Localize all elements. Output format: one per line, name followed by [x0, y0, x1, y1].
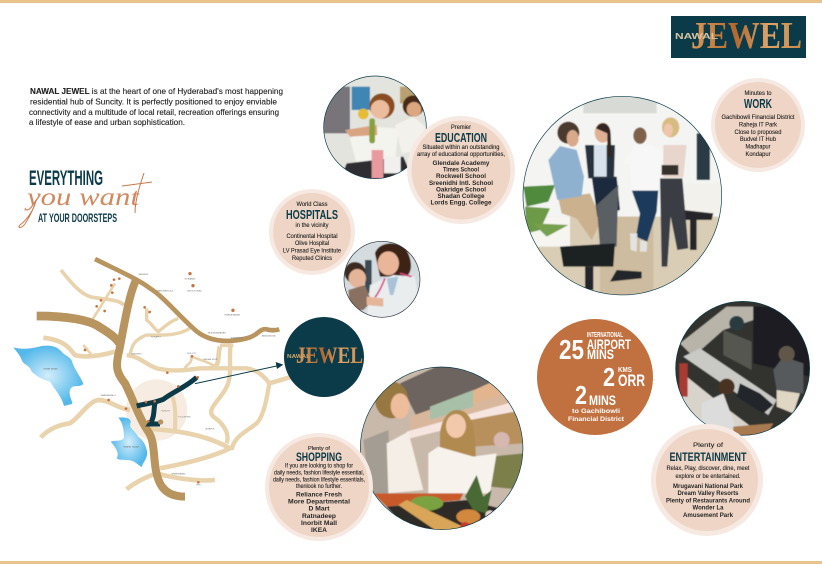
- work text circle: Minutes to: [744, 90, 772, 97]
- connectivity stats circle: to Gachibowli: [572, 408, 620, 415]
- photo: shopping: [357, 363, 527, 537]
- map: place labels: OSMAN SAGAR: [43, 368, 58, 371]
- hospitals text circle: Continental Hospital: [286, 233, 338, 240]
- education text circle: Lords Engg. College: [430, 200, 492, 206]
- map: site marker: [158, 419, 163, 425]
- map: lake 2: [111, 417, 147, 467]
- work text circle: Raheja IT Park: [739, 122, 778, 128]
- education text circle: Premier: [451, 124, 472, 131]
- photo: hospitals: [344, 241, 420, 318]
- bottom gold band: [0, 561, 822, 564]
- intro paragraph: [29, 87, 283, 127]
- Jewel badge circle: [284, 317, 364, 397]
- education text circle: EDUCATION: [435, 130, 487, 145]
- logo: Nawal Jewel: JEWEL: [691, 15, 802, 57]
- connectivity stats circle: AIRPORT: [587, 336, 631, 352]
- heading: everything you want at your doorsteps: AT YOUR DOORSTEPS: [38, 211, 117, 225]
- hospitals text circle: Reputed Clinics: [292, 255, 333, 262]
- map: place labels: SHANKARPALLY: [101, 394, 117, 397]
- hospitals text circle: HOSPITALS: [286, 207, 338, 222]
- map: place labels: [43, 273, 276, 487]
- map: place labels: NARSINGI: [139, 273, 149, 276]
- map: place labels: SUN CITY: [187, 353, 197, 355]
- heading: everything you want at your doorsteps: [19, 167, 152, 228]
- shopping text circle: [265, 433, 373, 541]
- work text circle: [711, 78, 805, 172]
- education text circle: Oakridge School: [436, 186, 486, 194]
- map: place labels: KISMATPUR: [231, 336, 243, 339]
- entertainment text circle: Relax, Play, discover, dine, meet: [666, 465, 750, 472]
- connectivity stats circle: ORR: [618, 371, 645, 390]
- hospitals text circle: Olive Hospital: [295, 240, 329, 247]
- Jewel badge circle: JEWEL: [296, 343, 363, 368]
- map: place labels: HIMAYATNAGAR: [225, 313, 241, 316]
- work text circle: Kondapur: [746, 151, 771, 158]
- work text circle: WORK: [744, 96, 772, 111]
- shopping text circle: daily needs, fashion lifestyle essential,: [274, 470, 364, 476]
- connectivity stats circle: MINS: [587, 346, 614, 362]
- photo: work: [520, 93, 727, 300]
- map: place labels: SUNCITY: [161, 410, 171, 412]
- Jewel badge circle: NAWAL: [287, 354, 311, 360]
- connectivity stats circle: 25: [559, 334, 584, 365]
- intro paragraph: a lifestyle of ease and urban sophistication.: [29, 118, 185, 127]
- work text circle: Madhapur: [746, 144, 771, 150]
- education text circle: Situated within an outstanding: [422, 144, 500, 151]
- map: place labels: KOKAPET: [151, 336, 161, 339]
- map: place labels: MANCHIREVULA: [157, 290, 174, 293]
- location map: [13, 259, 290, 497]
- shopping text circle: thenlook no further.: [296, 483, 342, 490]
- education text circle: Sreenidhi Intl. School: [429, 180, 493, 187]
- hospitals text circle: World Class: [296, 201, 328, 208]
- shopping text circle: daily needs, fashion lifestyle essentials,: [273, 476, 365, 484]
- map: lake 1: [13, 346, 83, 406]
- map: place labels: CHILKUR ROAD: [187, 290, 202, 293]
- map: secondary roads: [41, 270, 290, 489]
- intro paragraph: connectivity and a multitude of local retail, recreation offerings ensuring: [29, 108, 279, 117]
- shopping text circle: IKEA: [311, 528, 328, 534]
- map: place labels: ATTAPUR: [205, 427, 215, 430]
- top gold band: [0, 0, 822, 3]
- entertainment text circle: explore or be entertained.: [676, 473, 741, 480]
- shopping text circle: Plenty of: [308, 446, 331, 452]
- entertainment text circle: Plenty of: [693, 442, 723, 449]
- map: highlighted access roads: [137, 377, 197, 424]
- entertainment text circle: [651, 424, 763, 536]
- heading: everything you want at your doorsteps: you want: [23, 184, 140, 211]
- entertainment text circle: Amusement Park: [683, 513, 734, 519]
- work text circle: Budvel IT Hub: [740, 136, 776, 143]
- entertainment text circle: ENTERTAINMENT: [670, 450, 747, 464]
- entertainment text circle: Mrugavani National Park: [673, 484, 744, 490]
- connectivity stats circle: 2: [575, 380, 587, 410]
- connectivity stats circle: [537, 319, 653, 435]
- work text circle: Close to proposed: [734, 129, 782, 136]
- heading: everything you want at your doorsteps: EVERYTHING: [29, 167, 103, 190]
- map: highlighted area around site: [126, 379, 187, 441]
- connectivity stats circle: 2: [603, 362, 615, 392]
- education text circle: array of educational opportunities,: [417, 151, 505, 158]
- map: place labels: RAJENDRANAGAR: [208, 332, 226, 335]
- map: place labels: LANGAR HOUZ: [203, 358, 218, 361]
- shopping text circle: Ratnadeep: [302, 514, 336, 520]
- photo: entertainment: [673, 300, 813, 440]
- map: place labels: ORR: [196, 485, 201, 487]
- map: major roads: [37, 259, 279, 497]
- work text circle: Gachibowli Financial District: [722, 114, 795, 121]
- connectivity stats circle: MINS: [589, 392, 616, 408]
- intro paragraph: residential hub of Suncity. It is perfectly positioned to enjoy enviable: [30, 98, 278, 106]
- shopping text circle: Reliance Fresh: [296, 492, 342, 498]
- hospitals text circle: in the vicinity: [296, 222, 329, 229]
- map: place dots: [84, 272, 235, 484]
- hospitals text circle: [269, 189, 355, 275]
- map: place labels: SHAMSHABAD: [171, 472, 186, 475]
- shopping text circle: Inorbit Mall: [301, 521, 337, 527]
- hospitals text circle: LV Prasad Eye Institute: [283, 248, 341, 254]
- map: place labels: BANDLAGUDA: [262, 335, 276, 338]
- map: place labels: TOLICHOWKI: [178, 416, 191, 418]
- education text circle: [407, 116, 515, 224]
- map: place labels: HIMAYAT SAGAR: [123, 445, 139, 448]
- education text circle: Rockwell School: [436, 173, 486, 180]
- shopping text circle: D Mart: [308, 506, 330, 512]
- shopping text circle: More Departmental: [288, 500, 350, 506]
- entertainment text circle: Wonder La: [692, 506, 724, 512]
- map: arrow to Jewel badge: [195, 362, 283, 384]
- shopping text circle: SHOPPING: [296, 450, 342, 464]
- map: place labels: MOINABAD: [185, 277, 196, 280]
- education text circle: Shadan College: [438, 193, 485, 200]
- connectivity stats circle: INTERNATIONAL: [587, 332, 623, 339]
- education text circle: Glendale Academy: [432, 160, 490, 167]
- photo: education: [323, 76, 427, 179]
- map: place labels: GANDIPET: [132, 353, 143, 356]
- intro paragraph: NAWAL JEWEL is at the heart of one of Hyderabad's most happening: [30, 87, 283, 96]
- connectivity stats circle: Financial District: [568, 416, 625, 423]
- entertainment text circle: Dream Valley Resorts: [678, 491, 739, 497]
- connectivity stats circle: KMS: [618, 367, 632, 374]
- logo: Nawal Jewel: NAWAL: [675, 31, 718, 41]
- entertainment text circle: Plenty of Restaurants Around: [666, 498, 750, 504]
- education text circle: Times School: [443, 166, 479, 174]
- shopping text circle: If you are looking to shop for: [285, 462, 354, 470]
